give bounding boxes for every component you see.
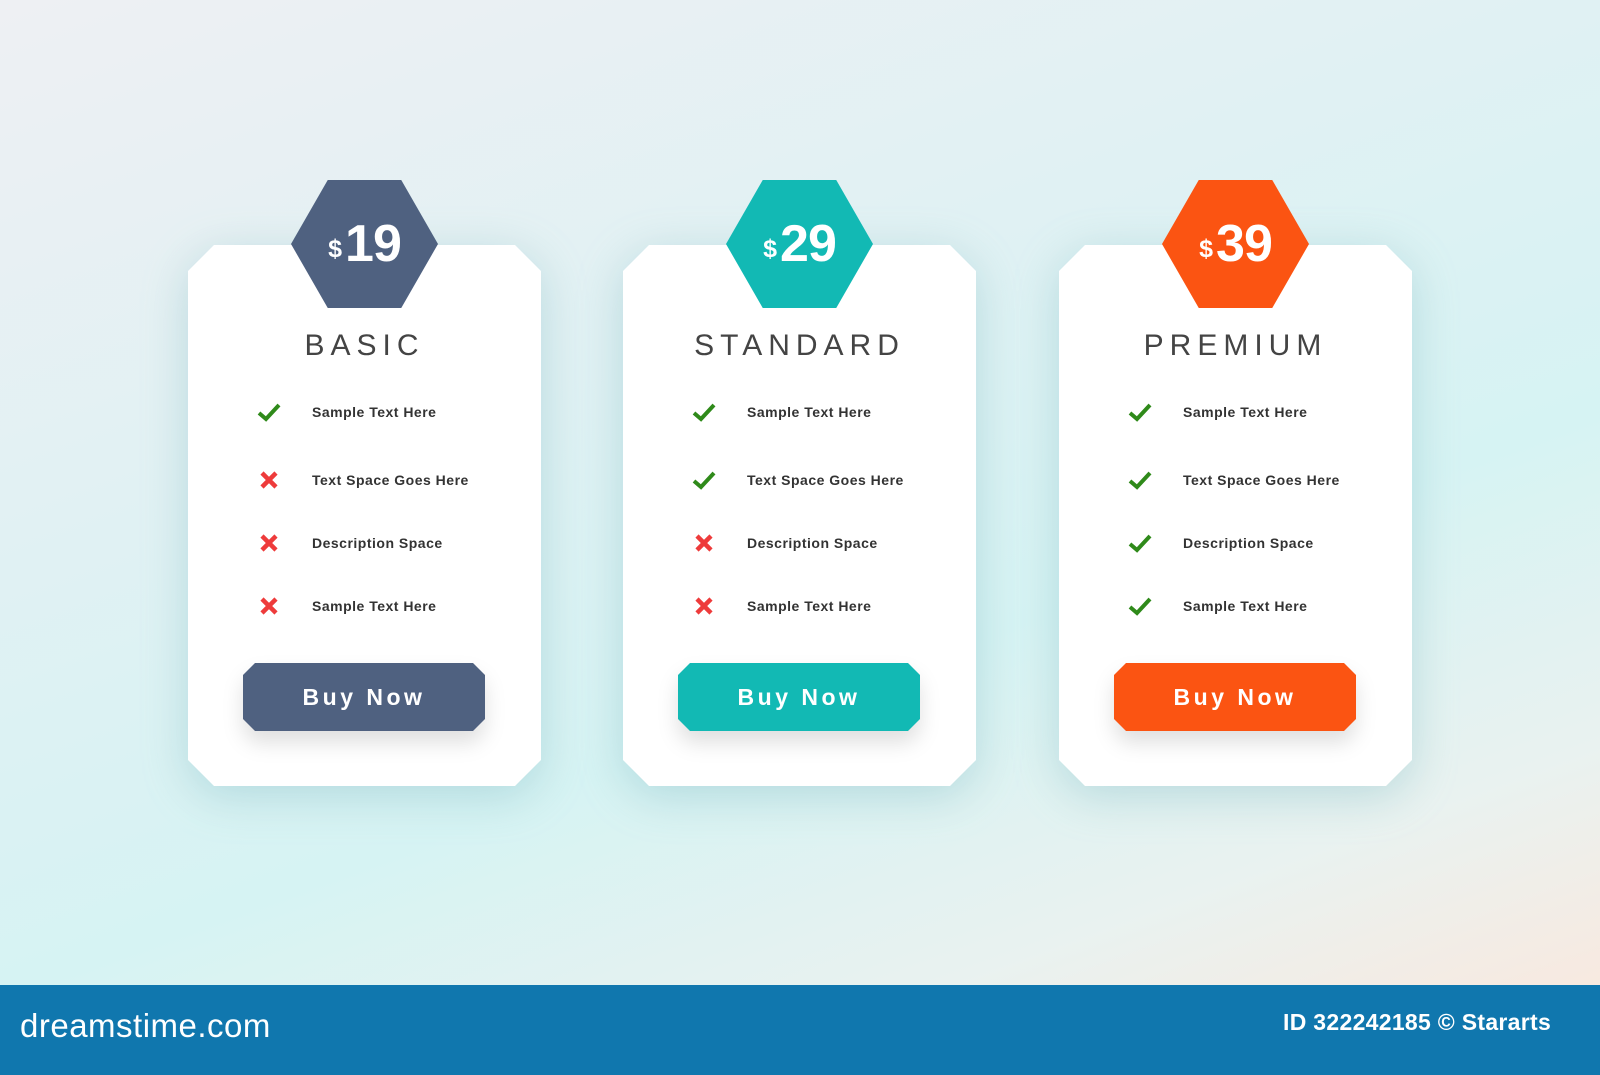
price hexagon: $19: $19	[328, 215, 401, 273]
price hexagon: $29	[726, 180, 873, 308]
feature 2	[1128, 472, 1339, 490]
feature 2: Text Space Goes Here	[747, 472, 904, 488]
price hexagon: $29: $29	[763, 215, 836, 273]
button: buy now basic: Buy Now	[303, 684, 425, 710]
feature 1: Sample Text Here	[312, 404, 436, 420]
title: premium: PREMIUM	[1144, 329, 1327, 362]
button: buy now standard: Buy Now	[738, 684, 860, 710]
feature 4	[1128, 598, 1306, 616]
feature 1: Sample Text Here	[747, 404, 871, 420]
price hexagon: $19	[291, 180, 438, 308]
panel: standard plan	[604, 236, 994, 814]
feature 3	[1128, 534, 1313, 553]
feature 4: Sample Text Here	[747, 598, 871, 614]
feature 3: Description Space	[747, 535, 878, 551]
feature 4	[260, 597, 436, 615]
panel: premium plan	[1042, 238, 1431, 815]
title: basic: BASIC	[304, 329, 425, 362]
feature 3: Description Space	[1183, 535, 1314, 551]
feature 2: Text Space Goes Here	[1183, 472, 1340, 488]
footer credit: ID 322242185 © Stararts	[1283, 1009, 1551, 1035]
feature 4: Sample Text Here	[1183, 598, 1307, 614]
feature 2	[692, 472, 903, 490]
feature 3	[260, 534, 442, 552]
feature 4	[696, 597, 870, 615]
feature 2	[260, 471, 468, 489]
feature 2: Text Space Goes Here	[312, 472, 469, 488]
feature 4: Sample Text Here	[312, 598, 436, 614]
title: standard: STANDARD	[694, 329, 905, 362]
button: buy now premium: Buy Now	[1174, 684, 1296, 710]
feature 1	[1128, 404, 1306, 422]
price hexagon: $39: $39	[1199, 215, 1272, 273]
feature 1	[258, 404, 436, 422]
price hexagon: $39	[1162, 180, 1309, 308]
feature 1	[692, 404, 870, 422]
footer bar	[0, 985, 1600, 1075]
feature 3: Description Space	[312, 535, 443, 551]
feature 1: Sample Text Here	[1183, 404, 1307, 420]
feature 3	[696, 534, 877, 552]
panel: basic plan	[169, 236, 560, 814]
footer logo text: dreamstime.com	[20, 1007, 271, 1044]
